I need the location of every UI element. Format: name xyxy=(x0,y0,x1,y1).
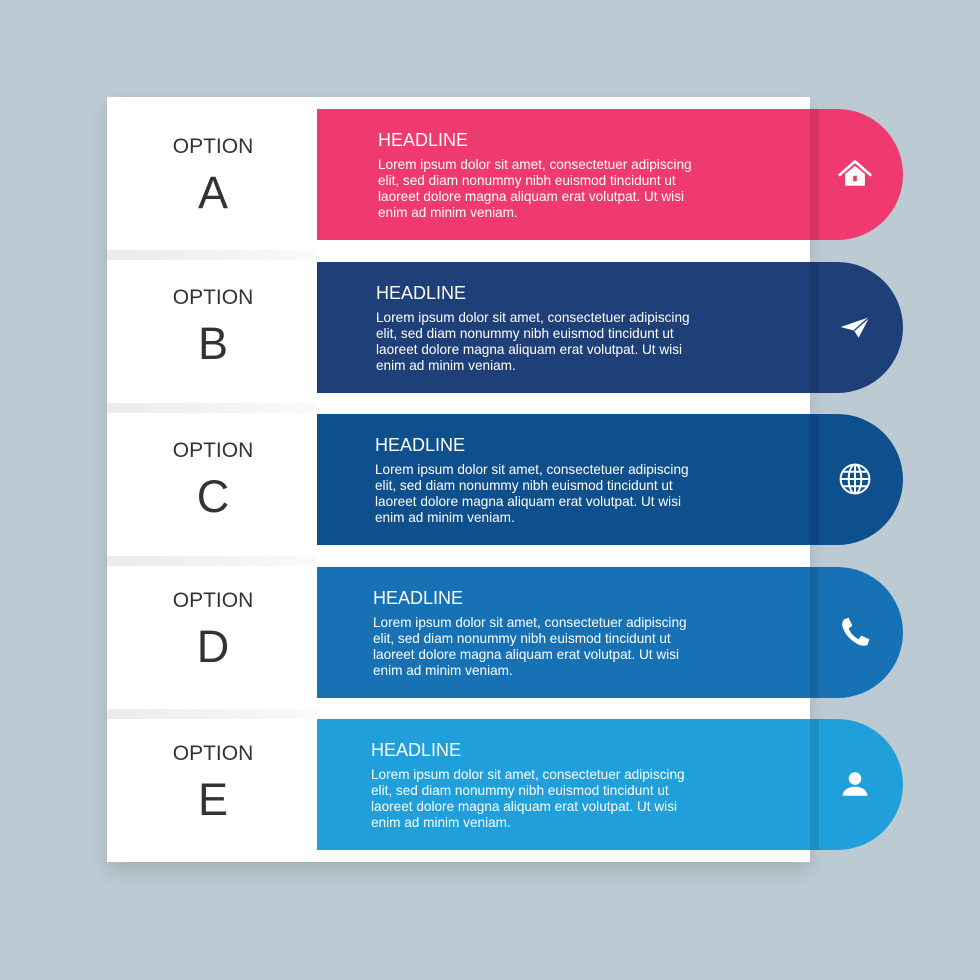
label: option D: OPTION xyxy=(173,589,253,612)
label: option C xyxy=(173,439,253,522)
bar A: Lorem ipsum dolor sit amet, consectetuer adipiscing elit, sed diam nonummy nibh euismod tincidunt ut laoreet dolore magna aliquam erat volutpat. Ut wisi enim ad minim veniam. xyxy=(378,157,692,220)
bar C: Lorem ipsum dolor sit amet, consectetuer adipiscing elit, sed diam nonummy nibh euismod tincidunt ut laoreet dolore magna aliquam erat volutpat. Ut wisi enim ad minim veniam. xyxy=(375,462,689,525)
bar B: HEADLINE xyxy=(376,283,466,303)
label: option D xyxy=(173,589,253,672)
bar C xyxy=(317,414,903,545)
label: option A: OPTION xyxy=(173,135,253,158)
label: option C: OPTION xyxy=(173,439,253,462)
label: option A: A xyxy=(198,167,228,218)
divider shadows xyxy=(107,250,317,260)
label: option E xyxy=(173,742,253,825)
bar A: HEADLINE xyxy=(378,130,468,150)
label: option B: OPTION xyxy=(173,286,253,309)
label: option B xyxy=(173,286,253,369)
bar D: Lorem ipsum dolor sit amet, consectetuer adipiscing elit, sed diam nonummy nibh euismod tincidunt ut laoreet dolore magna aliquam erat volutpat. Ut wisi enim ad minim veniam. xyxy=(373,615,687,678)
icon: phone xyxy=(842,618,870,646)
bar E: HEADLINE xyxy=(371,740,461,760)
bar B xyxy=(317,262,903,393)
bar D: HEADLINE xyxy=(373,588,463,608)
panel: white card xyxy=(107,97,810,862)
icon: user xyxy=(842,772,868,796)
label: option E: OPTION xyxy=(173,742,253,765)
bar C: HEADLINE xyxy=(375,435,465,455)
label: option A xyxy=(173,135,253,218)
icon: paper plane xyxy=(840,318,869,338)
label: option B: B xyxy=(198,318,228,369)
label: option C: C xyxy=(197,471,229,522)
bar B: Lorem ipsum dolor sit amet, consectetuer adipiscing elit, sed diam nonummy nibh euismod tincidunt ut laoreet dolore magna aliquam erat volutpat. Ut wisi enim ad minim veniam. xyxy=(376,310,690,373)
label: option E: E xyxy=(198,774,228,825)
icon: globe xyxy=(840,464,870,494)
bar D xyxy=(317,567,903,698)
label: option D: D xyxy=(197,621,229,672)
bar E: Lorem ipsum dolor sit amet, consectetuer adipiscing elit, sed diam nonummy nibh euismod tincidunt ut laoreet dolore magna aliquam erat volutpat. Ut wisi enim ad minim veniam. xyxy=(371,767,685,830)
bar E xyxy=(317,719,903,850)
bar A xyxy=(317,109,903,240)
icon: home xyxy=(838,160,872,186)
